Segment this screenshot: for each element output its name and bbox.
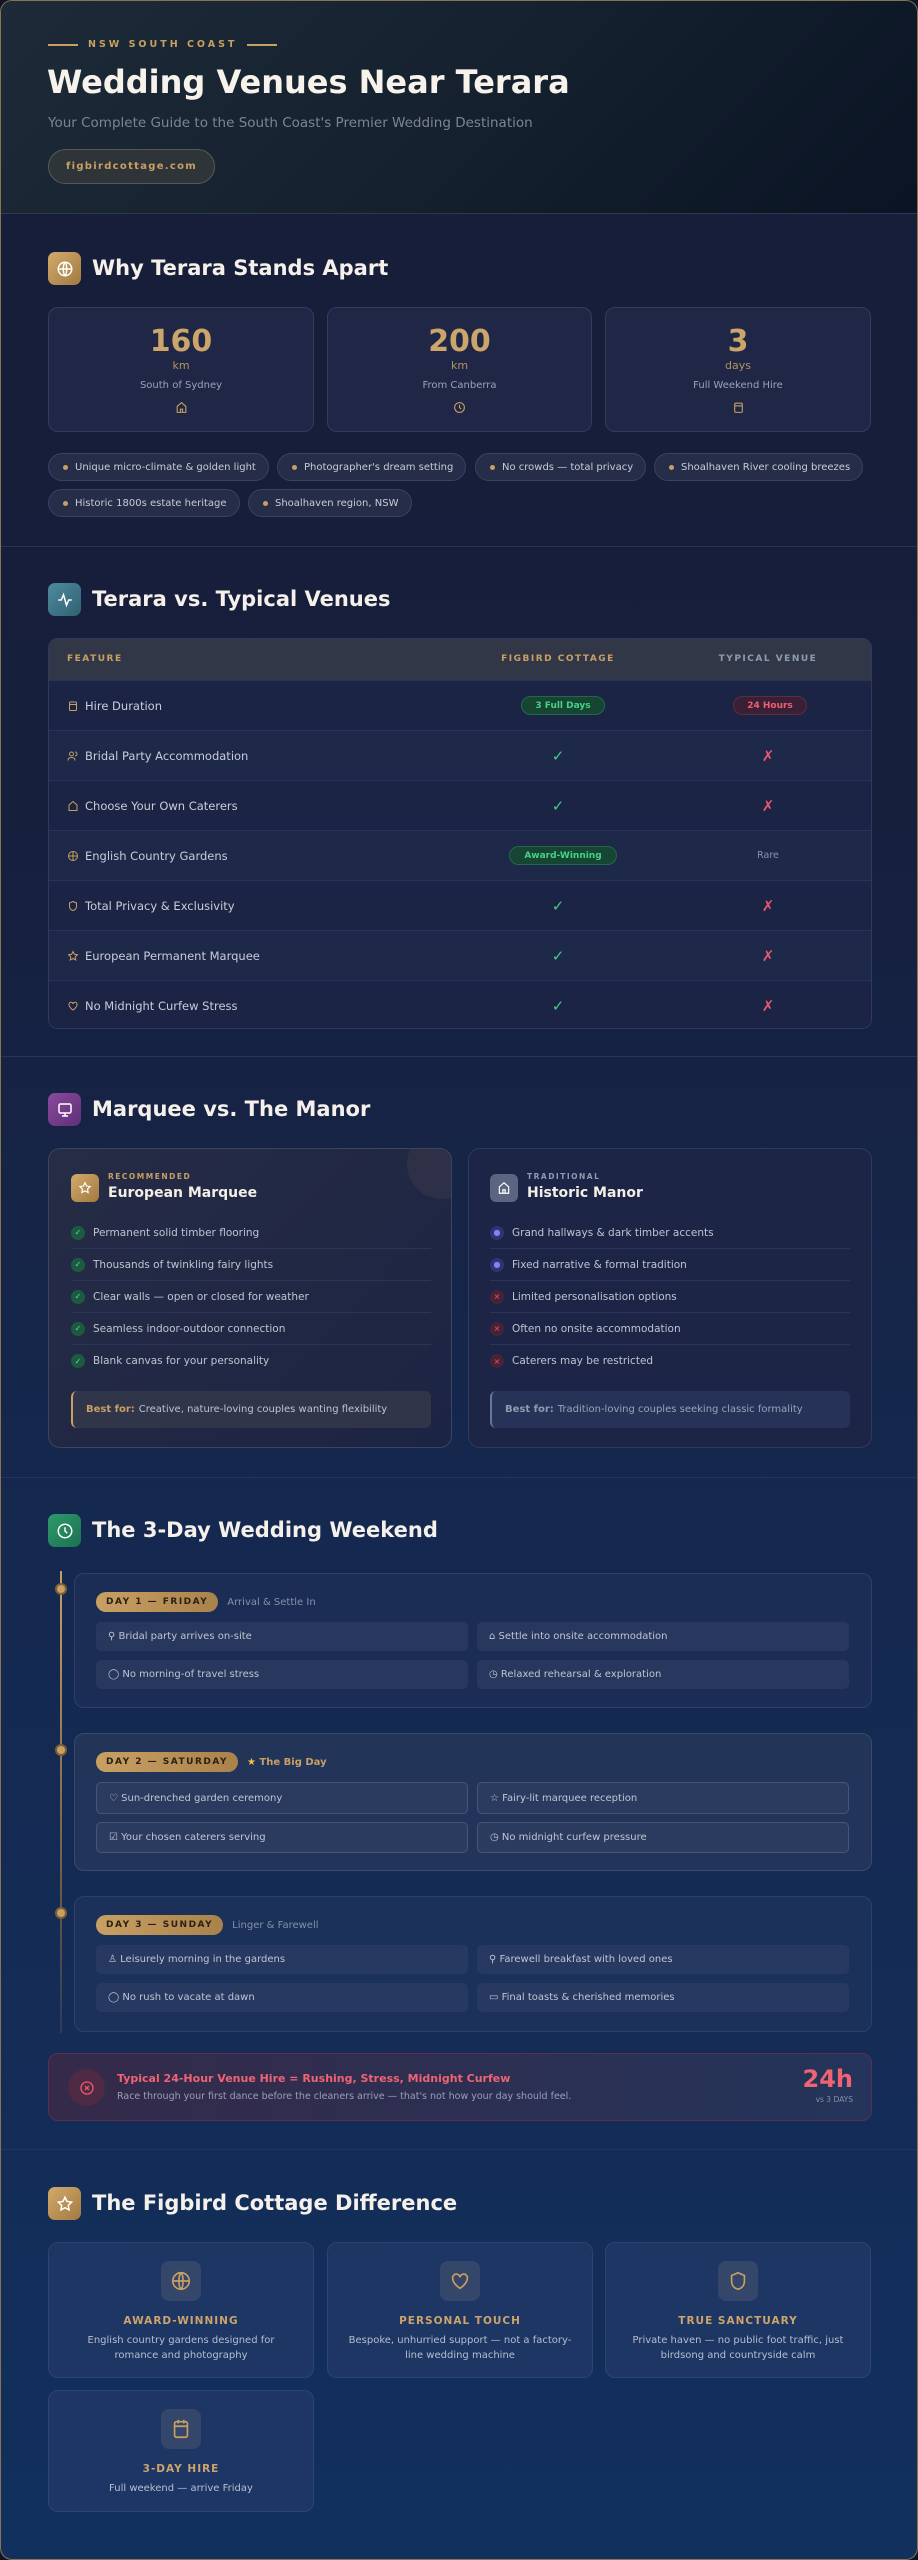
- panel: Historic Manor: [468, 1148, 872, 1448]
- day 2 card: ♡ Sun-drenched garden ceremony: [109, 1792, 282, 1804]
- manor list: [490, 1226, 850, 1368]
- table header: FEATURE: [67, 654, 123, 664]
- best for: manor: Tradition-loving couples seeking classic formality: [558, 1404, 803, 1415]
- stat: 3 days: 3: [728, 324, 748, 359]
- table header: [49, 639, 873, 680]
- row: bridal party: [49, 730, 873, 780]
- day 1 card: ⚲ Bridal party arrives on-site: [108, 1631, 252, 1642]
- icon: house: [490, 1174, 518, 1202]
- row: curfew: ✗: [762, 996, 774, 1014]
- day 3 card: ▭ Final toasts & cherished memories: [489, 1992, 675, 2003]
- comparison table: [48, 638, 872, 1029]
- row: caterers: Choose Your Own Caterers: [85, 798, 238, 812]
- marquee list: [71, 1226, 431, 1368]
- table header: FIGBIRD COTTAGE: [501, 654, 615, 664]
- eyebrow: NSW South Coast: NSW SOUTH COAST: [88, 39, 237, 50]
- day 3 card: ♙ Leisurely morning in the gardens: [108, 1954, 285, 1965]
- header: [1, 1, 918, 214]
- stat: 160 km: 160: [150, 324, 212, 359]
- day 1 card: ⌂ Settle into onsite accommodation: [489, 1631, 667, 1642]
- card: 3-day hire: [48, 2390, 314, 2512]
- icon: star: [71, 1174, 99, 1202]
- feature tags: Shoalhaven River cooling breezes: [681, 462, 850, 472]
- manor list: Limited personalisation options: [512, 1290, 677, 1302]
- timeline: [55, 1571, 872, 2033]
- row: hire duration: 3 Full Days: [535, 700, 591, 710]
- stat: 160 km: km: [172, 359, 190, 372]
- row: gardens: English Country Gardens: [85, 848, 228, 862]
- section heading: The 3-Day Wedding Weekend: [48, 1514, 438, 1547]
- marquee list: ✓: [75, 1292, 81, 1301]
- marquee list: ✓: [75, 1228, 81, 1237]
- stat: 200 km: km: [451, 359, 468, 372]
- section heading: Marquee vs. The Manor: Marquee vs. The Manor: [92, 1097, 370, 1121]
- feature tags: Historic 1800s estate heritage: [75, 498, 227, 508]
- manor list: ●: [494, 1260, 500, 1269]
- row: privacy: ✗: [762, 896, 774, 914]
- row: gardens: Award-Winning: [524, 850, 602, 860]
- panel: European Marquee: [48, 1148, 452, 1448]
- day 2 card: ☆ Fairy-lit marquee reception: [490, 1792, 637, 1804]
- marquee list: ✓: [75, 1324, 81, 1333]
- table header: TYPICAL VENUE: [719, 654, 817, 664]
- manor list: Grand hallways & dark timber accents: [512, 1226, 714, 1238]
- row: marquee: European Permanent Marquee: [85, 948, 260, 962]
- row: privacy: ✓: [552, 896, 564, 914]
- card: award-winning: [48, 2242, 314, 2378]
- best for: manor: [490, 1391, 850, 1428]
- row: hire duration: Hire Duration: [85, 698, 162, 712]
- marquee list: ✓: [75, 1356, 81, 1366]
- callout: 24-hour venue warning: vs 3 DAYS: [816, 2095, 853, 2104]
- section heading: Terara vs. Typical Venues: Terara vs. Typical Venues: [92, 587, 390, 611]
- feature tags: Unique micro-climate & golden light: [75, 462, 256, 472]
- day 2 card: DAY 2 — SATURDAY: [106, 1757, 228, 1767]
- stat: 160 km: [48, 307, 314, 432]
- day 3 card: Linger & Farewell: [232, 1920, 319, 1930]
- day 2 card: ☑ Your chosen caterers serving: [109, 1832, 266, 1843]
- manor list: ●: [494, 1228, 500, 1237]
- row: bridal party: Bridal Party Accommodation: [85, 748, 248, 762]
- subtitle: Your Complete Guide to the South Coast's Premier Wedding Destination: [48, 115, 533, 131]
- marquee list: ✓: [75, 1260, 81, 1269]
- row: curfew: [49, 980, 873, 1030]
- card: true sanctuary: Private haven — no public foot traffic, just birdsong and countryside calm: [633, 2335, 843, 2361]
- section heading: Why Terara Stands Apart: Why Terara Stands Apart: [92, 256, 388, 280]
- best for: manor: Best for:: [505, 1404, 554, 1415]
- card: personal touch: Bespoke, unhurried support — not a factory-line wedding machine: [349, 2335, 571, 2361]
- section heading: The 3-Day Wedding Weekend: The 3-Day Wedding Weekend: [92, 1518, 438, 1542]
- section heading: The Figbird Cottage Difference: [48, 2187, 457, 2220]
- day 2 card: [74, 1733, 872, 1871]
- section heading: Marquee vs. The Manor: [48, 1093, 370, 1126]
- manor list: Caterers may be restricted: [512, 1355, 653, 1367]
- row: marquee: ✗: [762, 946, 774, 964]
- day 3 card: ◯ No rush to vacate at dawn: [108, 1992, 255, 2003]
- row: hire duration: [49, 680, 873, 730]
- row: curfew: ✓: [552, 996, 564, 1014]
- best for: marquee: Best for:: [86, 1404, 135, 1415]
- card: award-winning: AWARD-WINNING: [123, 2315, 239, 2327]
- panel: Historic Manor: Historic Manor: [527, 1185, 643, 1201]
- row: privacy: Total Privacy & Exclusivity: [85, 898, 235, 912]
- feature tags: [48, 453, 863, 517]
- day 2 card: ★ The Big Day: [247, 1756, 327, 1768]
- marquee list: Seamless indoor-outdoor connection: [93, 1322, 285, 1334]
- manor list: Fixed narrative & formal tradition: [512, 1258, 687, 1270]
- day 3 card: DAY 3 — SUNDAY: [106, 1920, 213, 1930]
- panel: European Marquee: European Marquee: [108, 1185, 257, 1201]
- stat: 200 km: From Canberra: [422, 380, 497, 391]
- stat: 3 days: [605, 307, 871, 432]
- row: privacy: [49, 880, 873, 930]
- callout: 24-hour venue warning: Race through your first dance before the cleaners arrive — that's not how your day should feel.: [117, 2091, 571, 2102]
- row: bridal party: ✓: [552, 746, 564, 764]
- row: caterers: ✗: [762, 796, 774, 814]
- row: gardens: Rare: [757, 850, 779, 861]
- card: 3-day hire: 3-DAY HIRE: [143, 2463, 219, 2475]
- manor list: ×: [494, 1292, 500, 1301]
- day 1 card: DAY 1 — FRIDAY: [106, 1597, 208, 1607]
- row: gardens: [49, 830, 873, 880]
- row: marquee: [49, 930, 873, 980]
- panel: European Marquee: RECOMMENDED: [108, 1172, 191, 1181]
- stat: 3 days: Full Weekend Hire: [693, 380, 783, 391]
- row: caterers: ✓: [552, 796, 564, 814]
- feature tags: No crowds — total privacy: [502, 462, 633, 472]
- best for: marquee: Creative, nature-loving couples wanting flexibility: [139, 1404, 387, 1415]
- manor list: ×: [494, 1324, 500, 1333]
- card: personal touch: PERSONAL TOUCH: [399, 2315, 521, 2327]
- best for: marquee: [71, 1391, 431, 1428]
- day 1 card: Arrival & Settle In: [227, 1596, 316, 1608]
- row: caterers: [49, 780, 873, 830]
- day 3 card: [74, 1896, 872, 2032]
- stat: 200 km: [327, 307, 592, 432]
- marquee list: Thousands of twinkling fairy lights: [93, 1258, 273, 1270]
- panel: Historic Manor: TRADITIONAL: [527, 1172, 600, 1181]
- row: bridal party: ✗: [762, 746, 774, 764]
- row: marquee: ✓: [552, 946, 564, 964]
- title: Wedding Venues Near Terara: [47, 63, 570, 101]
- section heading: The Figbird Cottage Difference: The Figbird Cottage Difference: [92, 2191, 457, 2215]
- row: hire duration: 24 Hours: [747, 700, 793, 710]
- day 1 card: ◯ No morning-of travel stress: [108, 1669, 259, 1680]
- day 1 card: [74, 1573, 872, 1708]
- marquee list: Blank canvas for your personality: [93, 1355, 269, 1367]
- feature tags: Shoalhaven region, NSW: [275, 498, 398, 508]
- section heading: Why Terara Stands Apart: [48, 252, 388, 285]
- section heading: Terara vs. Typical Venues: [48, 583, 390, 616]
- icon: x circle: [68, 2069, 105, 2106]
- difference cards: [48, 2242, 871, 2512]
- stat: 160 km: South of Sydney: [140, 380, 222, 391]
- callout: 24-hour venue warning: Typical 24-Hour Venue Hire = Rushing, Stress, Midnight Curfew: [117, 2072, 510, 2085]
- stat: 3 days: days: [725, 359, 751, 372]
- day 1 card: ◷ Relaxed rehearsal & exploration: [489, 1669, 661, 1680]
- card: 3-day hire: Full weekend — arrive Friday: [109, 2483, 253, 2494]
- card: personal touch: [327, 2242, 593, 2378]
- stat: 200 km: 200: [428, 324, 491, 359]
- marquee list: Clear walls — open or closed for weather: [93, 1290, 309, 1302]
- manor list: Often no onsite accommodation: [512, 1322, 681, 1334]
- day 3 card: ⚲ Farewell breakfast with loved ones: [489, 1954, 673, 1965]
- card: true sanctuary: TRUE SANCTUARY: [678, 2315, 798, 2327]
- card: true sanctuary: [605, 2242, 871, 2378]
- marquee list: Permanent solid timber flooring: [93, 1226, 259, 1238]
- stat cards: [48, 307, 871, 432]
- callout: 24-hour venue warning: [48, 2053, 872, 2121]
- day 2 card: ◷ No midnight curfew pressure: [490, 1832, 647, 1843]
- manor list: ×: [494, 1356, 500, 1366]
- card: award-winning: English country gardens designed for romance and photography: [88, 2335, 274, 2361]
- row: curfew: No Midnight Curfew Stress: [85, 998, 238, 1012]
- feature tags: Photographer's dream setting: [304, 462, 453, 472]
- website pill: [48, 149, 215, 184]
- website pill: figbirdcottage.com: [66, 161, 197, 172]
- callout: 24-hour venue warning: 24h: [803, 2065, 853, 2093]
